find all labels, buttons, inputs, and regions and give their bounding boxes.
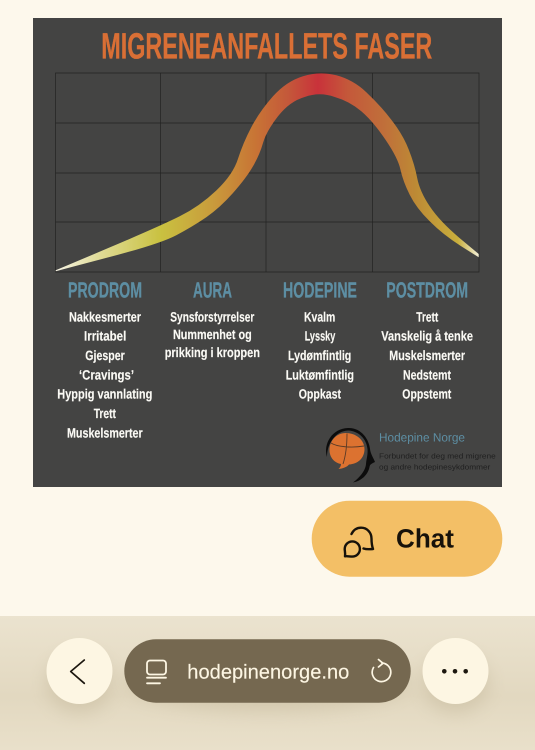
column: prodrom: Muskelsmerter xyxy=(67,425,143,440)
column: prodrom: Nakkesmerter xyxy=(69,310,142,324)
address bar xyxy=(124,639,411,703)
chat button xyxy=(312,501,502,577)
back button xyxy=(46,638,112,704)
column: aura: prikking i kroppen xyxy=(165,345,260,360)
migraine intensity curve xyxy=(56,73,479,271)
column: prodrom: Gjesper xyxy=(85,348,125,363)
column: aura: Synsforstyrrelser xyxy=(170,310,255,324)
icon: tabs xyxy=(147,660,166,683)
column: aura: AURA xyxy=(193,277,232,302)
column: prodrom: PRODROM xyxy=(68,277,142,302)
column: aura xyxy=(165,277,260,360)
column: prodrom: Hyppig vannlating xyxy=(57,387,152,402)
column: prodrom: Trett xyxy=(94,406,116,421)
column: hodepine: Lydømfintlig xyxy=(288,348,351,363)
icon: head with speech bubble xyxy=(326,428,375,482)
column: postdrom xyxy=(381,277,473,402)
column: hodepine: Oppkast xyxy=(299,387,341,402)
browser toolbar xyxy=(0,616,535,750)
column: hodepine xyxy=(283,277,357,402)
icon: reload xyxy=(372,660,391,682)
column: postdrom: Oppstemt xyxy=(402,387,452,402)
logo: Hodepine Norge: Forbundet for deg med migrene xyxy=(379,452,496,461)
column: prodrom xyxy=(57,277,152,440)
column: prodrom: ‘Cravings’ xyxy=(79,367,134,382)
column: postdrom: Muskelsmerter xyxy=(389,348,466,363)
logo: Hodepine Norge xyxy=(326,428,496,482)
column: hodepine: Kvalm xyxy=(304,310,335,324)
more button xyxy=(422,638,488,704)
logo: Hodepine Norge: og andre hodepinesykdommer xyxy=(379,462,491,471)
address bar: hodepinenorge.no xyxy=(187,662,349,684)
column: postdrom: Vanskelig å tenke xyxy=(381,329,473,344)
column: postdrom: Nedstemt xyxy=(403,367,451,382)
icon: chat bubbles xyxy=(345,528,373,557)
infographic panel xyxy=(33,18,502,487)
logo: Hodepine Norge: Hodepine Norge xyxy=(379,430,465,444)
column: hodepine: HODEPINE xyxy=(283,277,357,302)
column: prodrom: Irritabel xyxy=(84,329,126,344)
column: hodepine: Lyssky xyxy=(305,329,336,344)
column: aura: Nummenhet og xyxy=(173,327,252,342)
phase chart xyxy=(56,73,479,272)
column: hodepine: Luktømfintlig xyxy=(286,367,354,382)
column: postdrom: POSTDROM xyxy=(386,277,468,302)
chat button: Chat xyxy=(396,523,454,553)
column: postdrom: Trett xyxy=(416,310,439,324)
